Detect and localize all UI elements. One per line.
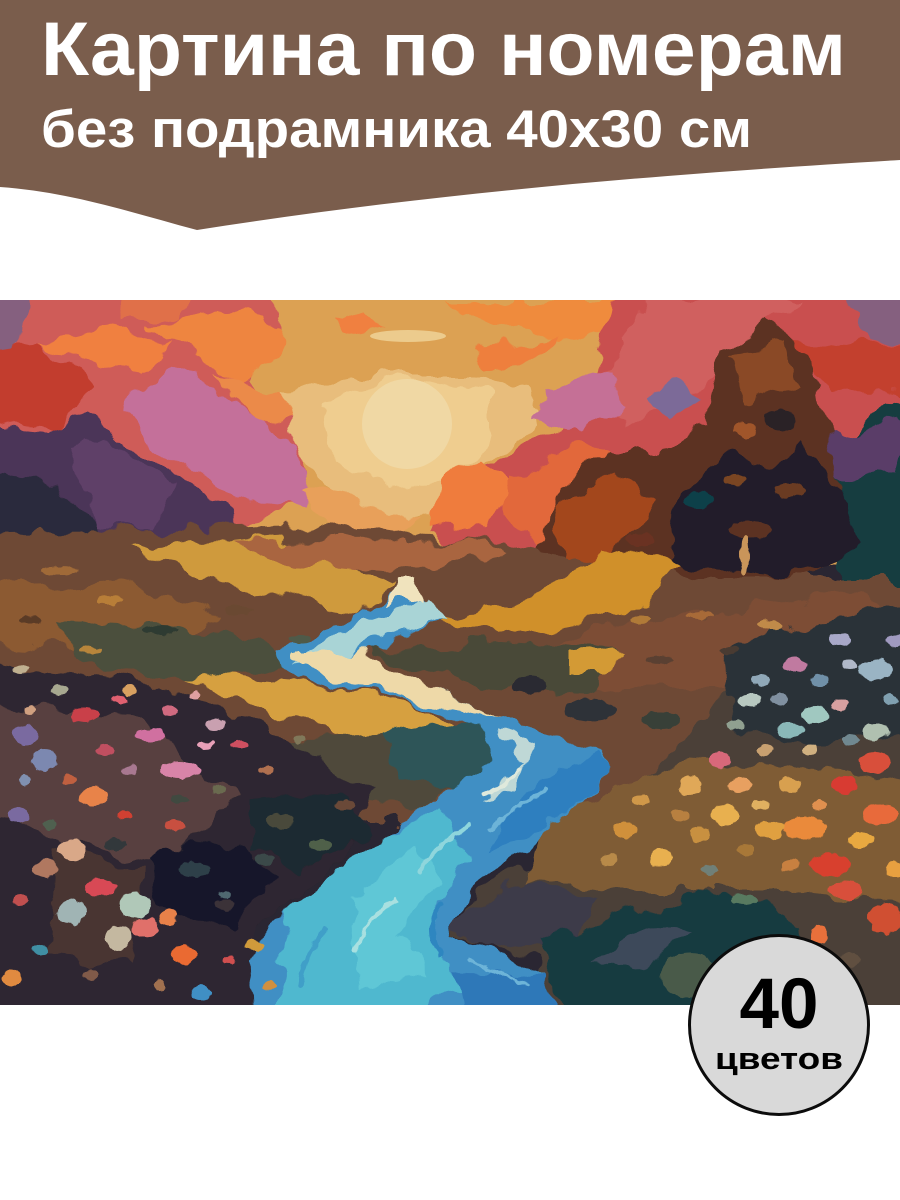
tree — [530, 325, 860, 580]
foreground right bank — [448, 606, 900, 1005]
cloud above sun — [370, 330, 446, 342]
header banner — [0, 0, 900, 230]
badge label: цветов — [715, 1041, 843, 1076]
subtitle: без подрамника 40х30 см — [41, 100, 752, 159]
badge: 40 colours — [690, 936, 868, 1114]
sun — [362, 379, 452, 469]
badge number: 40 — [740, 965, 818, 1044]
painting: sunset river landscape — [0, 300, 900, 1005]
foreground left — [0, 664, 376, 969]
flowers and speckles — [3, 410, 900, 1000]
large colour areas — [0, 300, 900, 1005]
title: Картина по номерам — [41, 7, 846, 92]
distant hills — [0, 402, 900, 588]
river water streaks — [300, 770, 545, 985]
sky — [0, 300, 900, 566]
river — [250, 582, 610, 1050]
midground fields — [0, 525, 900, 820]
